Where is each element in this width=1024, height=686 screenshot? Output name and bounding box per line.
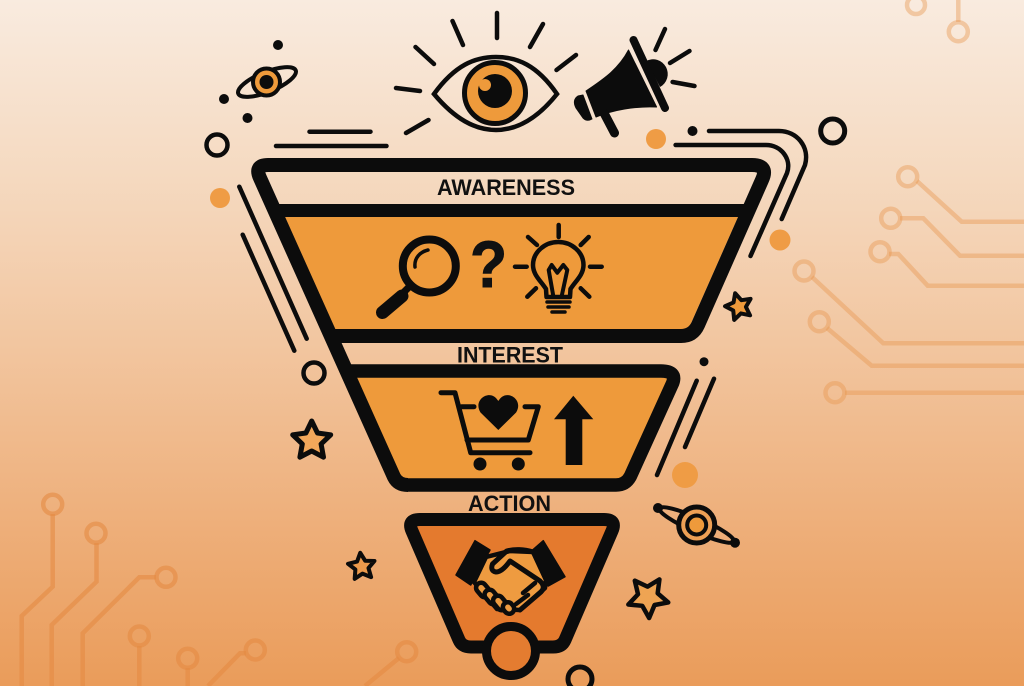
decorative lines right of interest xyxy=(657,357,714,488)
icon: question mark: ? xyxy=(470,229,507,302)
decorative curved lines: top right xyxy=(646,119,845,256)
decorative lines left of funnel xyxy=(239,187,324,384)
icon: star left xyxy=(293,421,331,457)
label: awareness: AWARENESS xyxy=(437,175,575,200)
icon: planet bottom right xyxy=(653,502,740,548)
icon: star bottom right xyxy=(622,569,676,622)
circuit traces: bottom left xyxy=(22,495,416,686)
circle bottom xyxy=(568,667,592,686)
icon: eye with rays xyxy=(396,13,576,133)
funnel section: awareness xyxy=(258,165,764,485)
icon: up arrow xyxy=(554,396,593,465)
circuit traces: top right xyxy=(794,0,1024,402)
icon: bottom circle xyxy=(486,626,536,676)
icon: light bulb xyxy=(515,225,602,312)
icon: star bottom left xyxy=(347,551,376,579)
icon: megaphone xyxy=(574,29,694,133)
label: action: ACTION xyxy=(468,491,551,516)
funnel section: interest xyxy=(349,371,674,485)
icon: magnifying glass xyxy=(382,240,456,312)
icon: shopping cart with heart xyxy=(441,393,538,470)
funnel section: action xyxy=(411,520,613,676)
decorative dots and lines: top left xyxy=(206,40,386,208)
icon: handshake xyxy=(456,541,565,616)
label: interest: INTEREST xyxy=(457,342,564,368)
icon: planet top left xyxy=(235,61,299,103)
funnel xyxy=(258,165,764,676)
icon: star right xyxy=(722,290,755,321)
